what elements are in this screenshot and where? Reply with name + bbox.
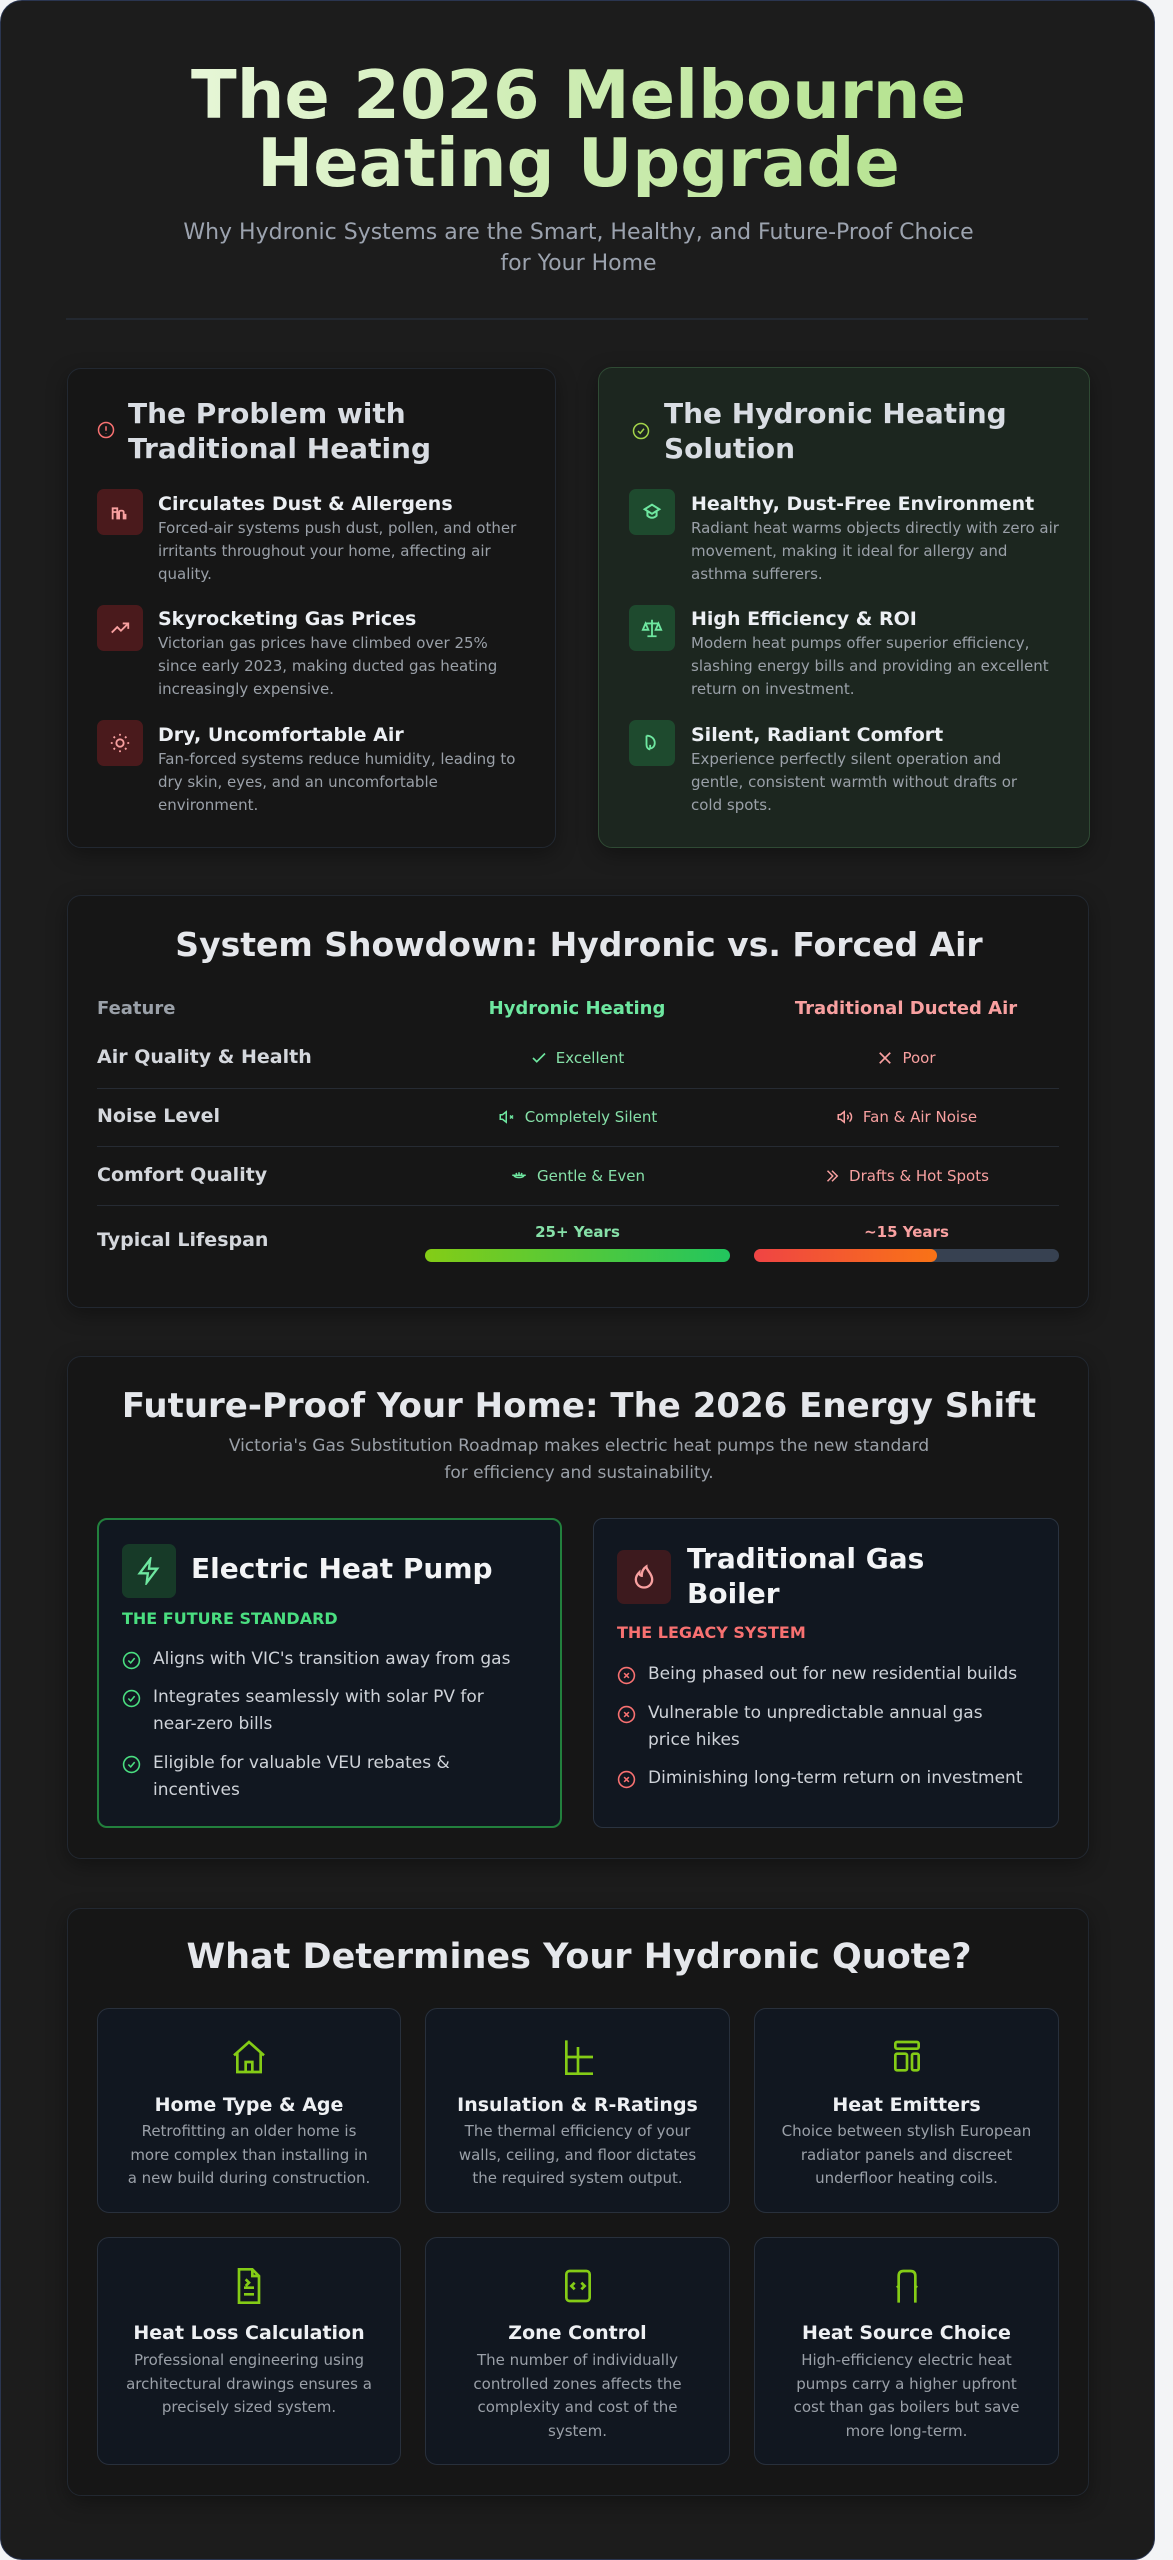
- card: gas boiler: THE LEGACY SYSTEM: [617, 1623, 806, 1642]
- card: heat source: Heat Source Choice: [802, 2322, 1011, 2344]
- icon: bolt: [122, 1544, 176, 1598]
- subtitle: future: Victoria's Gas Substitution Roadmap makes electric heat pumps the new standard for efficiency and sustainability.: [229, 1436, 929, 1483]
- text: Victorian gas prices have climbed over 25% since early 2023, making ducted gas heating increasingly expensive.: [158, 634, 497, 698]
- title: The 2026 Melbourne: [191, 56, 966, 134]
- card: insulation: Insulation & R-Ratings: [457, 2094, 698, 2116]
- icon: check: [632, 422, 650, 440]
- card: electric heat pump: Eligible for valuable VEU rebates & incentives: [153, 1753, 450, 1800]
- text: Skyrocketing Gas Prices: [158, 608, 416, 630]
- text: Poor: [902, 1049, 936, 1067]
- row: air quality: [97, 1046, 936, 1068]
- item: dry air: [97, 720, 515, 814]
- text: Typical Lifespan: [97, 1229, 268, 1251]
- panel: future-proof: [67, 1356, 1089, 1859]
- text: Forced-air systems push dust, pollen, and other irritants throughout your home, affecting air quality.: [158, 519, 516, 583]
- text: Excellent: [556, 1049, 624, 1067]
- panel: quote factors: [67, 1908, 1089, 2496]
- item: healthy: [629, 489, 1059, 583]
- card: gas boiler: Vulnerable to unpredictable annual gas price hikes: [648, 1703, 983, 1750]
- card: heat loss: [97, 2237, 401, 2465]
- text: Modern heat pumps offer superior efficiency, slashing energy bills and providing an excellent return on investment.: [691, 634, 1049, 698]
- icon: flame: [617, 1550, 671, 1604]
- text: Traditional Ducted Air: [795, 998, 1017, 1019]
- text: Fan-forced systems reduce humidity, leading to dry skin, eyes, and an uncomfortable environment.: [158, 750, 515, 814]
- panel: showdown: [67, 895, 1089, 1308]
- text: Completely Silent: [525, 1108, 657, 1126]
- subtitle: Why Hydronic Systems are the Smart, Healthy, and Future-Proof Choice for Your Home: [183, 220, 974, 276]
- text: Radiant heat warms objects directly with zero air movement, making it ideal for allergy and asthma sufferers.: [691, 519, 1059, 583]
- card: home type: Retrofitting an older home is more complex than installing in a new build during construction.: [128, 2122, 370, 2187]
- card: emitters: Choice between stylish European radiator panels and discreet underfloor heating coils.: [782, 2122, 1031, 2187]
- text: High Efficiency & ROI: [691, 608, 917, 630]
- text: 25+ Years: [535, 1223, 620, 1241]
- text: Comfort Quality: [97, 1164, 267, 1186]
- text: ~15 Years: [864, 1223, 949, 1241]
- heading: problem: The Problem with: [128, 397, 406, 430]
- heading: problem: [128, 397, 431, 465]
- card: heat source: [754, 2237, 1059, 2465]
- heading: gas boiler: Boiler: [687, 1577, 780, 1610]
- card: zone control: The number of individually controlled zones affects the complexity and cost of the system.: [473, 2351, 682, 2440]
- card: electric heat pump: THE FUTURE STANDARD: [122, 1609, 338, 1628]
- heading: showdown: System Showdown: Hydronic vs. Forced Air: [175, 925, 983, 964]
- text: Hydronic Heating: [489, 998, 665, 1019]
- text: Drafts & Hot Spots: [849, 1167, 989, 1185]
- text: Air Quality & Health: [97, 1046, 312, 1068]
- card: emitters: Heat Emitters: [832, 2094, 981, 2116]
- text: Feature: [97, 998, 175, 1019]
- card: home type: Home Type & Age: [155, 2094, 343, 2116]
- heading: problem: Traditional Heating: [128, 432, 431, 465]
- card: electric heat pump: Integrates seamlessly with solar PV for near-zero bills: [153, 1687, 484, 1734]
- title: Heating Upgrade: [257, 124, 900, 202]
- card: emitters: [754, 2008, 1059, 2213]
- card: gas boiler: [593, 1518, 1059, 1828]
- card: zone control: [425, 2237, 730, 2465]
- heading: heat pump: Electric Heat Pump: [191, 1552, 493, 1585]
- title: [1, 61, 1156, 197]
- heading: solution: Solution: [664, 432, 795, 465]
- heading: solution: The Hydronic Heating: [664, 397, 1007, 430]
- list: drawbacks: Being phased out for new residential builds: [648, 1664, 1017, 1684]
- card: heat loss: Heat Loss Calculation: [133, 2322, 365, 2344]
- item: silent: [629, 720, 1018, 814]
- row: noise: [97, 1105, 977, 1127]
- heading: solution: [664, 397, 1007, 465]
- card: zone control: Zone Control: [508, 2322, 647, 2344]
- card: home type: [97, 2008, 401, 2213]
- text: Silent, Radiant Comfort: [691, 724, 943, 746]
- card: electric heat pump: [97, 1518, 562, 1828]
- text: Dry, Uncomfortable Air: [158, 724, 404, 746]
- item: dust: [97, 489, 516, 583]
- item: efficiency: [629, 605, 1049, 698]
- card: insulation: [425, 2008, 730, 2213]
- card: heat loss: Professional engineering using architectural drawings ensures a precisely sized system.: [126, 2351, 372, 2416]
- text: Gentle & Even: [537, 1167, 645, 1185]
- row: lifespan: [97, 1223, 1059, 1262]
- heading: future: Future-Proof Your Home: The 2026 Energy Shift: [122, 1386, 1036, 1426]
- row: comfort: [97, 1164, 989, 1186]
- card: gas boiler: Diminishing long-term return on investment: [648, 1768, 1022, 1788]
- text: Noise Level: [97, 1105, 220, 1127]
- heading: gas boiler: Traditional Gas: [687, 1542, 924, 1575]
- comparison table: [97, 998, 1059, 1262]
- heading: gas boiler: [687, 1542, 924, 1610]
- text: Experience perfectly silent operation and gentle, consistent warmth without drafts or cold spots.: [691, 750, 1017, 814]
- heading: quote: What Determines Your Hydronic Quote?: [186, 1937, 972, 1977]
- text: Circulates Dust & Allergens: [158, 493, 453, 515]
- text: Healthy, Dust-Free Environment: [691, 493, 1034, 515]
- text: Fan & Air Noise: [863, 1108, 977, 1126]
- card: heat source: High-efficiency electric heat pumps carry a higher upfront cost than gas boilers but save more long-term.: [794, 2351, 1019, 2440]
- icon: alert: [98, 422, 114, 438]
- panel: solution: [598, 367, 1090, 848]
- item: gas prices: [97, 605, 497, 698]
- list: benefits: Aligns with VIC's transition away from gas: [153, 1649, 510, 1669]
- panel: problem: [67, 368, 556, 848]
- card: insulation: The thermal efficiency of your walls, ceiling, and floor dictates the required system output.: [459, 2122, 696, 2187]
